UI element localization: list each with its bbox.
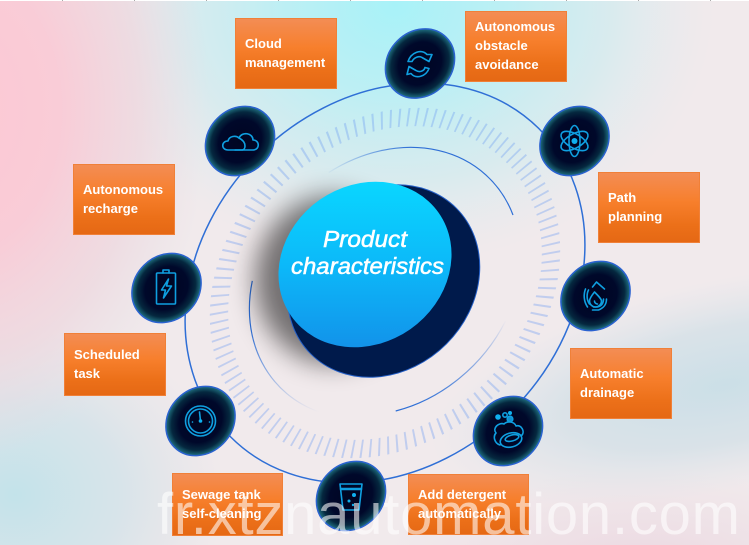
callout: Cloud management: Cloud	[245, 36, 282, 51]
callout: Add detergent automatically: automatically	[418, 506, 502, 521]
node: soap icon	[459, 382, 557, 480]
callout: Cloud management: management	[245, 55, 326, 70]
callout: Autonomous recharge: Autonomous	[83, 182, 163, 197]
callout: Autonomous obstacle avoidance: obstacle	[475, 38, 528, 53]
blue front disc	[246, 148, 484, 381]
tick ring	[151, 49, 619, 517]
inner arc top	[329, 147, 513, 215]
callout: Autonomous recharge	[74, 164, 174, 234]
callout: Automatic drainage: drainage	[580, 385, 634, 400]
callout: Path planning: Path	[608, 190, 636, 205]
callout: Path planning	[598, 172, 700, 242]
inner arc bottom right	[396, 321, 506, 411]
callout: Scheduled task: Scheduled	[74, 347, 140, 362]
callout: Automatic drainage	[570, 348, 672, 418]
node: atom icon	[526, 92, 623, 190]
callout: Cloud management	[236, 18, 336, 88]
callout: Scheduled task	[64, 334, 166, 396]
callout: Automatic drainage: Automatic	[580, 366, 644, 381]
callout: Autonomous obstacle avoidance: Autonomous	[475, 19, 555, 34]
central disc	[246, 145, 519, 417]
callout: Autonomous obstacle avoidance: avoidance	[475, 57, 539, 72]
callout: Sewage tank self-cleaning: Sewage tank	[182, 487, 262, 502]
callout: Add detergent automatically	[408, 474, 528, 534]
node: refresh icon	[371, 15, 469, 112]
callout: Scheduled task: task	[74, 366, 101, 381]
outer orbit ring	[104, 2, 666, 545]
node: gauge icon	[152, 372, 249, 470]
callout: Autonomous obstacle avoidance	[466, 12, 566, 82]
inner arc left	[249, 281, 320, 412]
node: cloud icon	[191, 92, 289, 190]
dark back disc	[248, 145, 519, 417]
callout: Sewage tank self-cleaning	[172, 474, 282, 536]
callout: Add detergent automatically: Add detergent	[418, 487, 507, 502]
disc shadow	[255, 196, 411, 364]
callout: Autonomous recharge: recharge	[83, 201, 138, 216]
callout: Path planning: planning	[608, 209, 662, 224]
central title: characteristics	[291, 253, 445, 279]
node: battery icon	[118, 239, 215, 337]
node: cup icon	[302, 447, 400, 545]
node: water drop icon	[547, 247, 644, 345]
central title: Product	[323, 226, 409, 252]
callout: Sewage tank self-cleaning: self-cleaning	[182, 506, 262, 521]
